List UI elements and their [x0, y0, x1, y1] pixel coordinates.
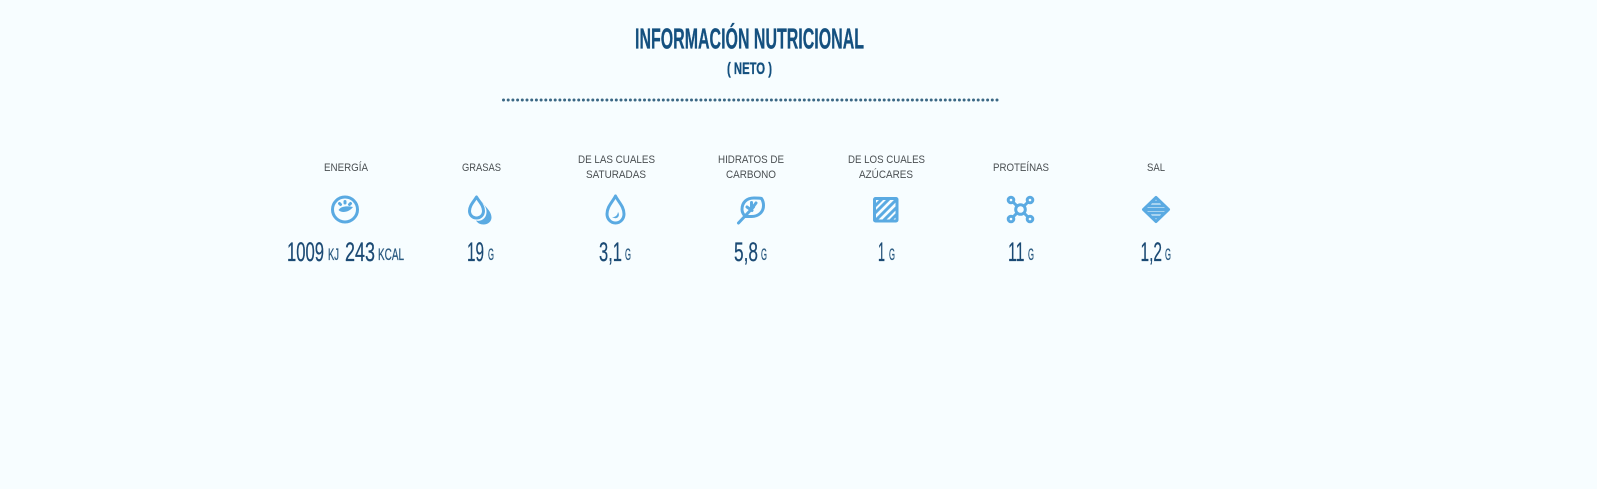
value: energy: 1009: [287, 237, 324, 267]
icon: gauge: [332, 197, 358, 222]
label: saturadas: SATURADAS: [586, 169, 646, 181]
nutrient: azúcares: [848, 154, 925, 267]
title: INFORMACIÓN NUTRICIONAL: [635, 22, 864, 56]
label: saturadas: [578, 154, 655, 181]
nutrient: saturadas: [578, 154, 655, 267]
nutrient: proteínas: [993, 161, 1049, 267]
value: sal: 1,2: [1140, 237, 1162, 267]
label: hidratos: [718, 154, 784, 181]
value: azúcares: 1: [878, 237, 885, 267]
value: energy: KCAL: [378, 245, 404, 264]
value: grasas: 19: [467, 237, 484, 267]
label: hidratos: CARBONO: [726, 169, 776, 181]
value: energy: [287, 237, 404, 267]
label: hidratos: HIDRATOS DE: [718, 154, 784, 166]
nutrient: sal: [1140, 162, 1171, 267]
value: energy: KJ: [328, 245, 339, 264]
nutrient: hidratos: [718, 154, 784, 267]
icon: salt diamond: [1144, 198, 1168, 222]
value: hidratos: 5,8: [734, 237, 758, 267]
nutrient: hidratos: G: [761, 245, 767, 264]
label: grasas: GRASAS: [462, 162, 501, 174]
nutrient: grasas: G: [488, 245, 494, 264]
value: proteínas: 11: [1008, 237, 1024, 267]
icon: leaf: [738, 198, 764, 223]
text: G: [1165, 245, 1171, 264]
label: azúcares: DE LOS CUALES: [848, 154, 925, 166]
label: saturadas: DE LAS CUALES: [578, 154, 655, 166]
value: saturadas: 3,1: [599, 237, 622, 267]
value: energy: 243: [345, 237, 375, 267]
icon: molecule: [1008, 197, 1033, 222]
subtitle: ( NETO ): [727, 59, 772, 78]
icon: drops: [470, 197, 492, 224]
nutrient: grasas: [462, 162, 501, 267]
label: energía: ENERGÍA: [324, 161, 368, 174]
icon: sugar square: [874, 198, 897, 221]
label: azúcares: AZÚCARES: [859, 168, 913, 181]
nutrient: saturadas: G: [625, 245, 631, 264]
label: sal: SAL: [1147, 162, 1165, 174]
nutrient: proteínas: G: [1028, 245, 1034, 264]
label: proteínas: PROTEÍNAS: [993, 161, 1049, 174]
label: azúcares: [848, 154, 925, 181]
nutrient: energía: [287, 161, 404, 267]
icon: drop: [607, 196, 624, 223]
nutrient: azúcares: G: [889, 245, 895, 264]
